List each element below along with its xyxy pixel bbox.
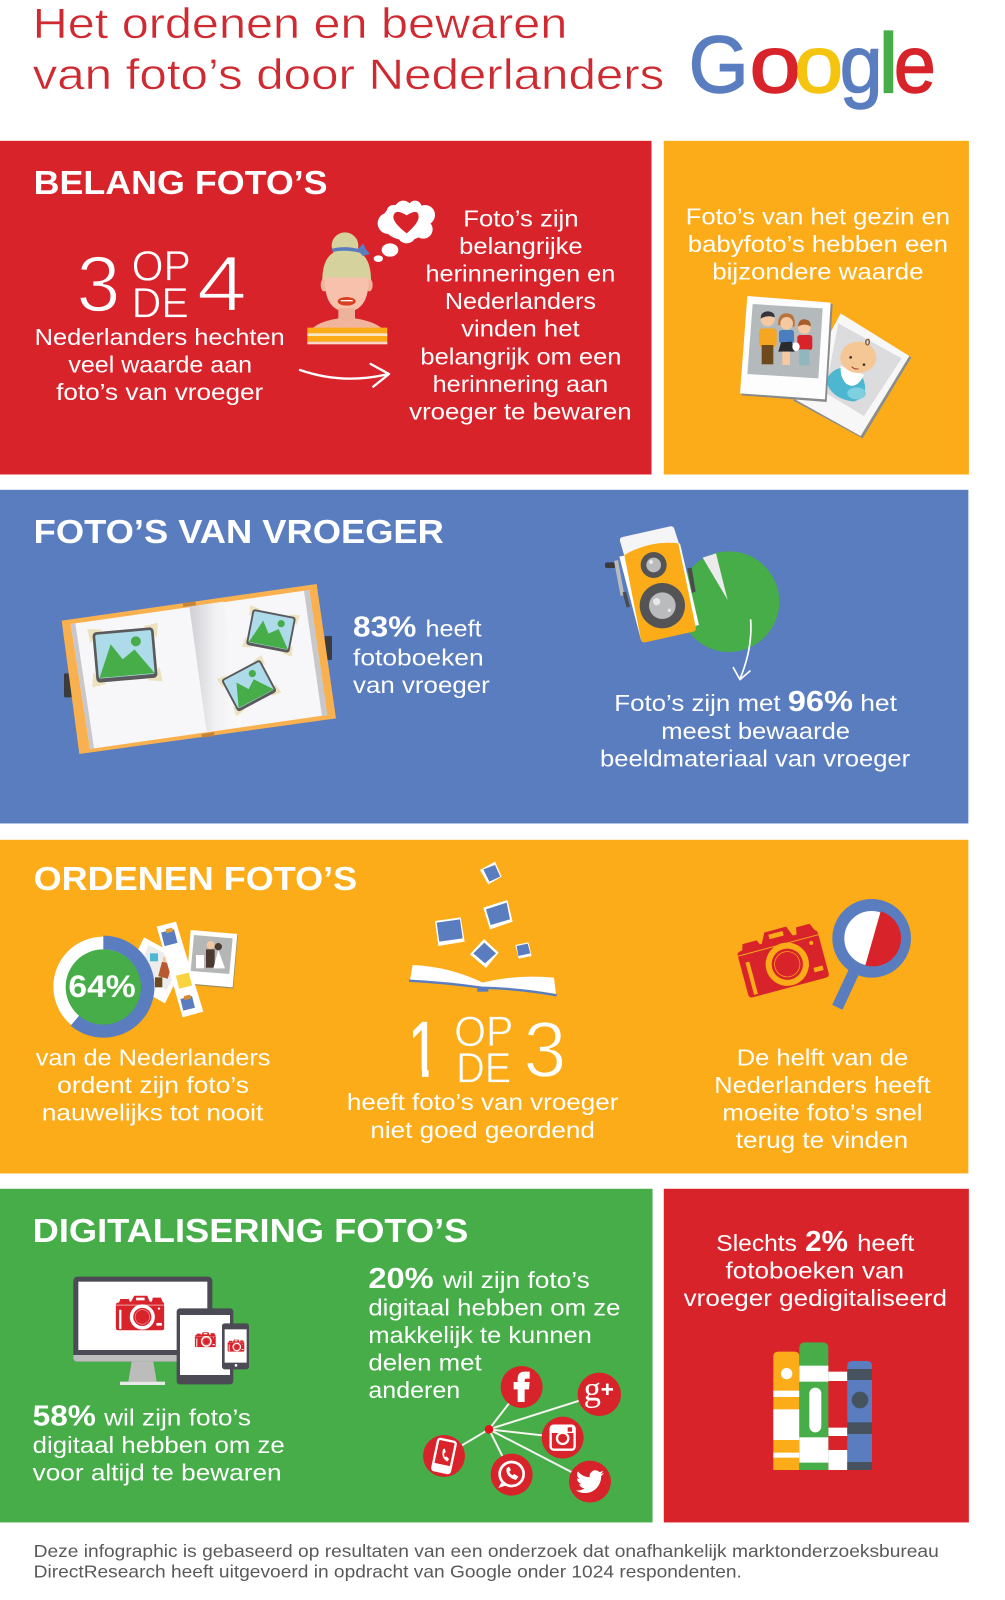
- panel: foto's van vroeger: [0, 490, 968, 823]
- text: gezin en babyfoto's: Foto’s van het gezin en: [686, 203, 950, 229]
- text: 58% altijd bewaren: 58%: [33, 1401, 96, 1433]
- text: 3 op 4 description: foto’s van vroeger: [56, 379, 263, 405]
- text: 64% description: nauwelijks tot nooit: [42, 1099, 264, 1125]
- book: thin white and red: [828, 1372, 847, 1470]
- text: 83% fotoboeken: 83%: [353, 612, 416, 644]
- text: herinneringen: vroeger te bewaren: [409, 398, 632, 424]
- text: helft moeite foto's terugvinden: De helft van de: [737, 1044, 908, 1070]
- stat: 3 op de 4: OP: [132, 243, 191, 291]
- text: gezin en babyfoto's: [686, 203, 950, 285]
- text: 64% description: [36, 1044, 270, 1125]
- icon: woman thinking of a heart: [300, 201, 435, 387]
- stat: 3 op de 4: 4: [197, 240, 247, 328]
- text: 96% bewaard beeldmateriaal: het: [860, 690, 897, 716]
- icon: monitor, tablet and phone: [73, 1277, 249, 1385]
- text: herinneringen: belangrijk om een: [420, 343, 621, 369]
- text: herinneringen: belangrijke: [459, 233, 583, 259]
- panel: 2% gedigitaliseerd: [664, 1189, 969, 1522]
- stat: 3 op de 4: [77, 240, 247, 328]
- text: 83% fotoboeken: van vroeger: [353, 672, 490, 698]
- icon: book with flying photos: [409, 862, 557, 995]
- footer note: [34, 1541, 939, 1582]
- text: 58% altijd bewaren: [33, 1401, 285, 1486]
- text: slechts 2%: [684, 1226, 947, 1311]
- text: herinneringen: [409, 206, 632, 424]
- text: 58% altijd bewaren: voor altijd te bewaren: [33, 1460, 282, 1486]
- icon: google plus: [578, 1371, 621, 1416]
- text: gezin en babyfoto's: babyfoto’s hebben een: [688, 231, 948, 257]
- heading: ordenen foto's: ORDENEN FOTO’S: [34, 861, 357, 898]
- logo: Google: G: [689, 18, 749, 109]
- panel: digitalisering foto's: [0, 1189, 653, 1522]
- text: herinneringen: herinneringen en: [426, 261, 615, 287]
- logo: Google: o: [749, 19, 801, 110]
- logo: Google: o: [794, 18, 843, 109]
- text: 1 op de 3 description: niet goed geordend: [370, 1117, 595, 1143]
- icon: loose photos: [123, 922, 238, 1017]
- text: 83% fotoboeken: [353, 612, 490, 698]
- footer note: Deze infographic is gebaseerd op resultaten van een onderzoek dat onafhankelijk marktonderzoeksbureau: [34, 1541, 939, 1561]
- heading: digitalisering foto's: DIGITALISERING FOTO’S: [33, 1213, 468, 1250]
- text: 96% bewaard beeldmateriaal: beeldmateriaal van vroeger: [600, 745, 910, 771]
- text: herinneringen: Foto’s zijn: [463, 206, 579, 232]
- text: herinneringen: vinden het: [461, 316, 580, 342]
- title: [33, 0, 664, 99]
- text: slechts 2%: Slechts: [716, 1230, 797, 1256]
- chart: 96% pie with camera: [605, 526, 779, 680]
- icon: social media network: [423, 1366, 621, 1503]
- text: 64% description: ordent zijn foto’s: [57, 1072, 249, 1098]
- text: 20% delen met anderen: digitaal hebben om ze: [368, 1294, 620, 1320]
- stat: 1 op de 3: DE: [456, 1045, 511, 1093]
- text: 20% delen met anderen: 20%: [368, 1263, 434, 1295]
- text: slechts 2%: heeft: [857, 1230, 915, 1256]
- logo: Google: l: [879, 16, 898, 110]
- stat: 1 op de 3: OP: [454, 1008, 513, 1056]
- icon: polaroid photos of family and baby: [740, 296, 911, 438]
- icon: facebook: [501, 1366, 543, 1408]
- text: 64% description: van de Nederlanders: [36, 1044, 270, 1070]
- text: slechts 2%: 2%: [805, 1226, 848, 1258]
- stat: 1 op de 3: 3: [523, 1006, 566, 1094]
- text: slechts 2%: vroeger gedigitaliseerd: [684, 1285, 947, 1311]
- icon: whatsapp: [491, 1454, 533, 1496]
- stat: 1 op de 3: 1: [408, 1006, 439, 1094]
- text: 83% fotoboeken: heeft: [426, 616, 482, 642]
- heading: foto's van vroeger: FOTO’S VAN VROEGER: [34, 514, 444, 551]
- heading: belang foto's: BELANG FOTO’S: [34, 165, 328, 202]
- icon: twitter: [569, 1461, 611, 1503]
- text: 3 op 4 description: [35, 324, 285, 405]
- panel: ordenen foto's: [0, 840, 968, 1173]
- text: 1 op de 3 description: [347, 1089, 619, 1143]
- chart: 64% donut: [60, 936, 155, 1038]
- text: 1 op de 3 description: heeft foto’s van vroeger: [347, 1089, 619, 1115]
- text: 96% bewaard beeldmateriaal: 96%: [788, 686, 853, 718]
- text: helft moeite foto's terugvinden: Nederlanders heeft: [714, 1072, 931, 1098]
- icon: phone: [423, 1435, 465, 1477]
- text: slechts 2%: fotoboeken van: [726, 1258, 904, 1284]
- text: 96% bewaard beeldmateriaal: meest bewaarde: [661, 718, 850, 744]
- footer note: DirectResearch heeft uitgevoerd in opdracht van Google onder 1024 respondenten.: [34, 1562, 742, 1582]
- icon: camera and magnifier with half pie: [734, 905, 905, 1007]
- text: 20% delen met anderen: delen met: [368, 1349, 482, 1375]
- icon: google plus: g: [584, 1371, 601, 1409]
- text: herinneringen: herinnering aan: [433, 371, 608, 397]
- book: blue: [847, 1361, 872, 1470]
- stat: 3 op de 4: 3: [77, 240, 120, 328]
- text: 20% delen met anderen: [368, 1263, 620, 1403]
- panel: belang foto's: [0, 141, 652, 474]
- text: 96% bewaard beeldmateriaal: Foto’s zijn met: [614, 690, 781, 716]
- stat: 3 op de 4: DE: [132, 279, 189, 327]
- icon: photo album: [62, 584, 336, 754]
- title: van foto’s door Nederlanders: [33, 51, 664, 99]
- panel: gezin en babyfoto's: [664, 141, 969, 474]
- text: 96% bewaard beeldmateriaal: [600, 686, 910, 771]
- text: herinneringen: Nederlanders: [445, 288, 596, 314]
- text: 83% fotoboeken: fotoboeken: [353, 644, 484, 670]
- text: 58% altijd bewaren: digitaal hebben om ze: [33, 1432, 285, 1458]
- book: green: [799, 1342, 828, 1470]
- title: Het ordenen en bewaren: [33, 0, 567, 48]
- text: 58% altijd bewaren: wil zijn foto’s: [103, 1405, 251, 1431]
- text: helft moeite foto's terugvinden: [714, 1044, 931, 1153]
- icon: instagram: [542, 1417, 584, 1459]
- book: orange: [773, 1352, 799, 1470]
- text: helft moeite foto's terugvinden: moeite foto’s snel: [722, 1099, 922, 1125]
- text: 3 op 4 description: Nederlanders hechten: [35, 324, 285, 350]
- text: 20% delen met anderen: makkelijk te kunnen: [368, 1322, 592, 1348]
- logo: Google: e: [894, 18, 936, 109]
- stat: 1 op de 3: [408, 1006, 566, 1094]
- logo: Google: g: [840, 18, 883, 109]
- logo: Google: [689, 16, 936, 110]
- text: gezin en babyfoto's: bijzondere waarde: [712, 259, 923, 285]
- text: 20% delen met anderen: anderen: [368, 1377, 460, 1403]
- icon: stack of books: [773, 1342, 872, 1470]
- text: 20% delen met anderen: wil zijn foto’s: [442, 1267, 590, 1293]
- text: 3 op 4 description: veel waarde aan: [68, 351, 252, 377]
- chart: 64% donut: 64%: [68, 968, 136, 1004]
- text: helft moeite foto's terugvinden: terug te vinden: [736, 1127, 908, 1153]
